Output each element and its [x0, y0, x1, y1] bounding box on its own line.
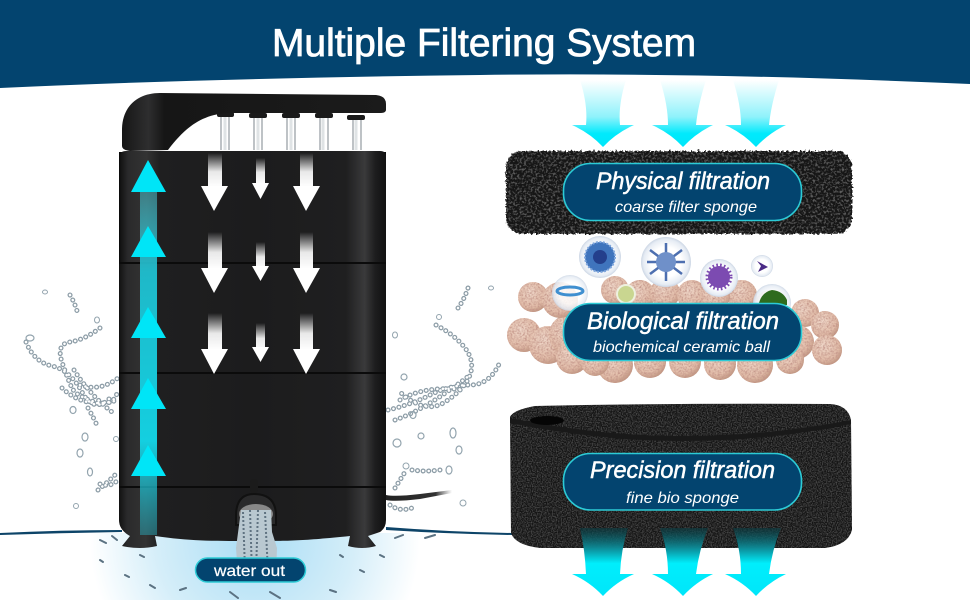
coarse filter sponge	[506, 151, 852, 234]
water pool splash	[90, 533, 435, 600]
label: physical filtration: coarse filter sponge	[615, 199, 757, 216]
microbe: green	[753, 284, 791, 322]
title: Multiple Filtering System	[272, 22, 696, 65]
ceramic balls	[507, 276, 842, 383]
label: biological filtration: biochemical ceramic ball	[593, 339, 770, 356]
microbe: blue virus	[641, 237, 691, 287]
microbe bubbles	[552, 236, 791, 322]
nozzles and water tubes	[217, 112, 365, 150]
body backing	[119, 152, 386, 492]
outflow water	[236, 510, 277, 575]
middle body section	[119, 264, 386, 372]
water surface line	[0, 527, 512, 535]
left water splash	[26, 290, 118, 508]
lower body section	[119, 374, 386, 486]
label: physical filtration	[564, 164, 802, 220]
lid spout	[122, 93, 386, 151]
sponge hole	[530, 416, 564, 425]
water out label: water out	[213, 563, 286, 580]
water out label	[196, 558, 306, 582]
filter device	[119, 93, 386, 575]
label: physical filtration: Physical filtration	[596, 168, 770, 195]
bottom cyan arrows	[572, 528, 786, 596]
microbe: yellow green	[617, 285, 635, 303]
label: precision filtration: Precision filtration	[590, 457, 775, 484]
microbe: blue ring	[552, 275, 588, 311]
power cord	[386, 490, 452, 501]
white down arrows row 3	[201, 313, 320, 374]
microbe: purple	[700, 259, 738, 297]
label: biological filtration	[564, 304, 802, 360]
label: precision filtration	[564, 454, 802, 510]
microbe: blue sphere	[579, 236, 621, 278]
top cyan arrows	[572, 80, 786, 147]
outlet nozzle	[236, 479, 276, 525]
label: precision filtration: fine bio sponge	[626, 490, 739, 507]
upper body section	[120, 151, 386, 262]
base with feet	[119, 488, 386, 548]
right water splash	[388, 286, 500, 509]
label: biological filtration: Biological filtration	[587, 308, 779, 335]
cyan up arrows	[131, 160, 166, 535]
header banner	[0, 0, 970, 88]
white down arrows row 2	[201, 232, 320, 293]
microbe: violet small	[751, 255, 773, 277]
white down arrows row 1	[201, 153, 320, 211]
fine bio sponge	[510, 404, 852, 548]
